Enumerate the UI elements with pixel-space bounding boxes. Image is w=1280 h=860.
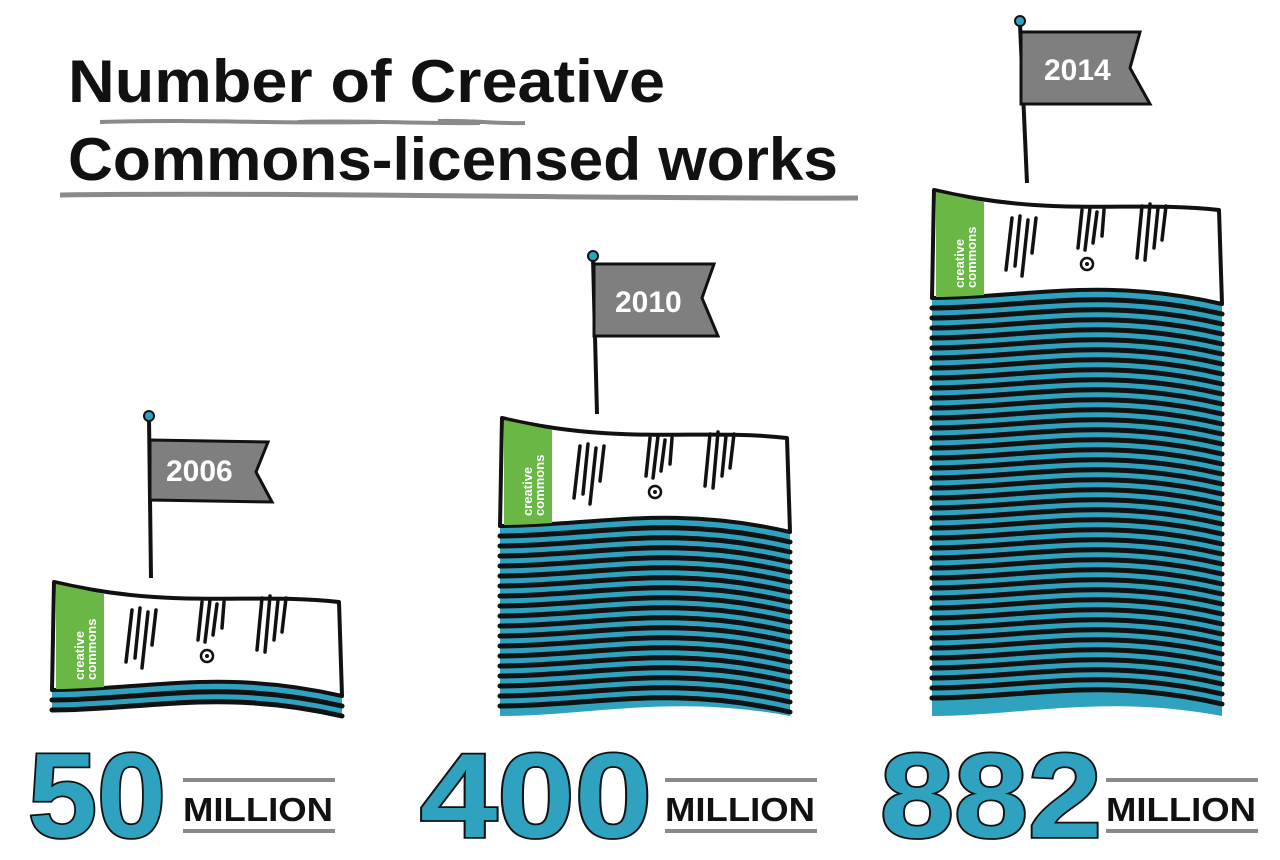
label: 50 million: MILLION (183, 791, 333, 828)
flag: 2010 (588, 251, 718, 414)
label: 50 million: 50 (28, 729, 166, 860)
stack: 2014 (932, 16, 1222, 716)
label: 882 million: 882 (880, 729, 1102, 860)
flag: 2006 (144, 411, 272, 578)
title: Commons-licensed works (68, 126, 838, 193)
stack: 2006 (52, 411, 342, 716)
title (60, 48, 858, 198)
flag: 2010: 2010 (615, 286, 682, 319)
stack: 2010 (500, 251, 790, 716)
label: 882 million: MILLION (1106, 791, 1256, 828)
flag: 2014: 2014 (1044, 54, 1111, 87)
label: 400 million (420, 729, 817, 860)
label: 400 million: 400 (420, 729, 652, 860)
flag: 2014 (1015, 16, 1150, 183)
title: Number of Creative (68, 48, 665, 115)
label: 400 million: MILLION (665, 791, 815, 828)
label: 882 million (880, 729, 1258, 860)
flag: 2006: 2006 (166, 455, 233, 488)
label: 50 million (28, 729, 335, 860)
